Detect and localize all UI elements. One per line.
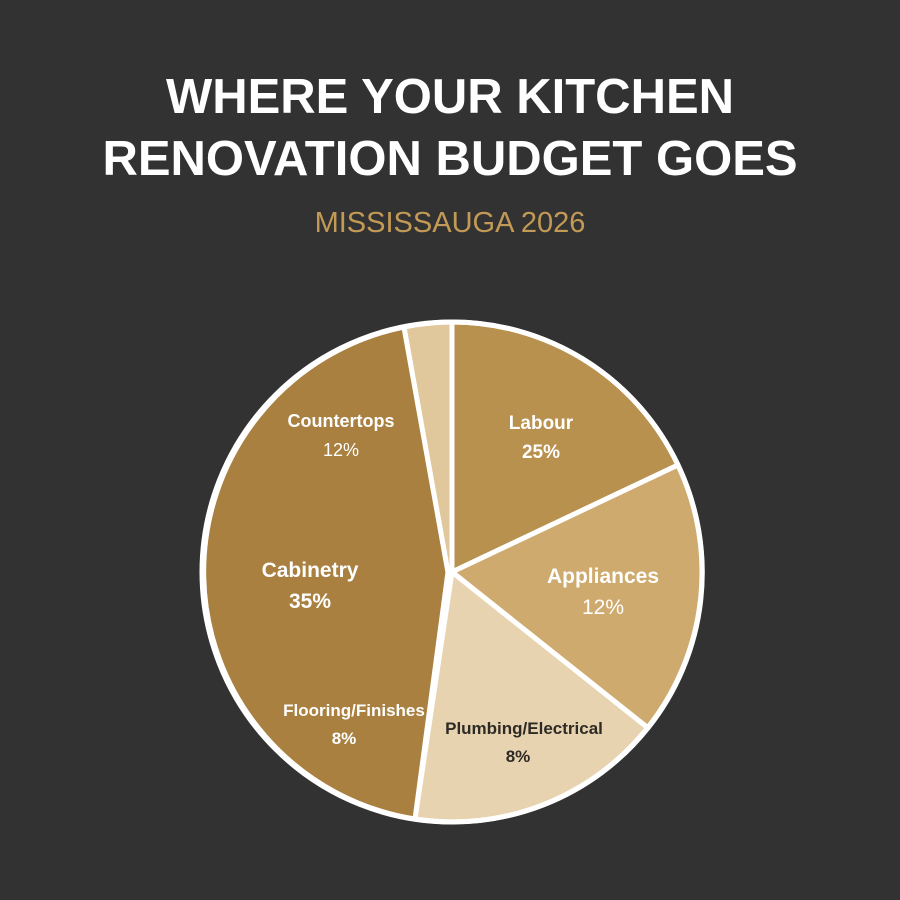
label: plumbing (445, 719, 603, 766)
title: WHERE YOUR KITCHEN (166, 70, 734, 124)
label: appliances (547, 565, 659, 619)
label: appliances: Appliances (547, 565, 659, 588)
label: countertops: Countertops (288, 411, 394, 431)
label: labour: Labour (509, 413, 574, 434)
slice: plumbing (415, 572, 648, 822)
slice: small (404, 322, 452, 572)
label: flooring: Flooring/Finishes (283, 701, 425, 720)
label: plumbing: Plumbing/Electrical (445, 719, 603, 738)
label: flooring (283, 701, 425, 748)
label: plumbing: 8% (506, 747, 530, 766)
slice: appliances (452, 465, 702, 728)
title (102, 70, 798, 186)
label: flooring: 8% (332, 729, 356, 748)
label: appliances: 12% (582, 596, 624, 619)
label: countertops (288, 411, 394, 460)
slice: labour (452, 322, 678, 572)
label: labour (509, 413, 574, 463)
label: cabinetry (262, 559, 359, 613)
label: labour: 25% (522, 442, 560, 463)
label: countertops: 12% (323, 440, 359, 460)
slice: cabinetry (204, 327, 448, 819)
title: RENOVATION BUDGET GOES (102, 132, 798, 186)
label: cabinetry: 35% (289, 590, 331, 613)
subtitle: MISSISSAUGA 2026 (315, 207, 585, 239)
label: cabinetry: Cabinetry (262, 559, 359, 582)
